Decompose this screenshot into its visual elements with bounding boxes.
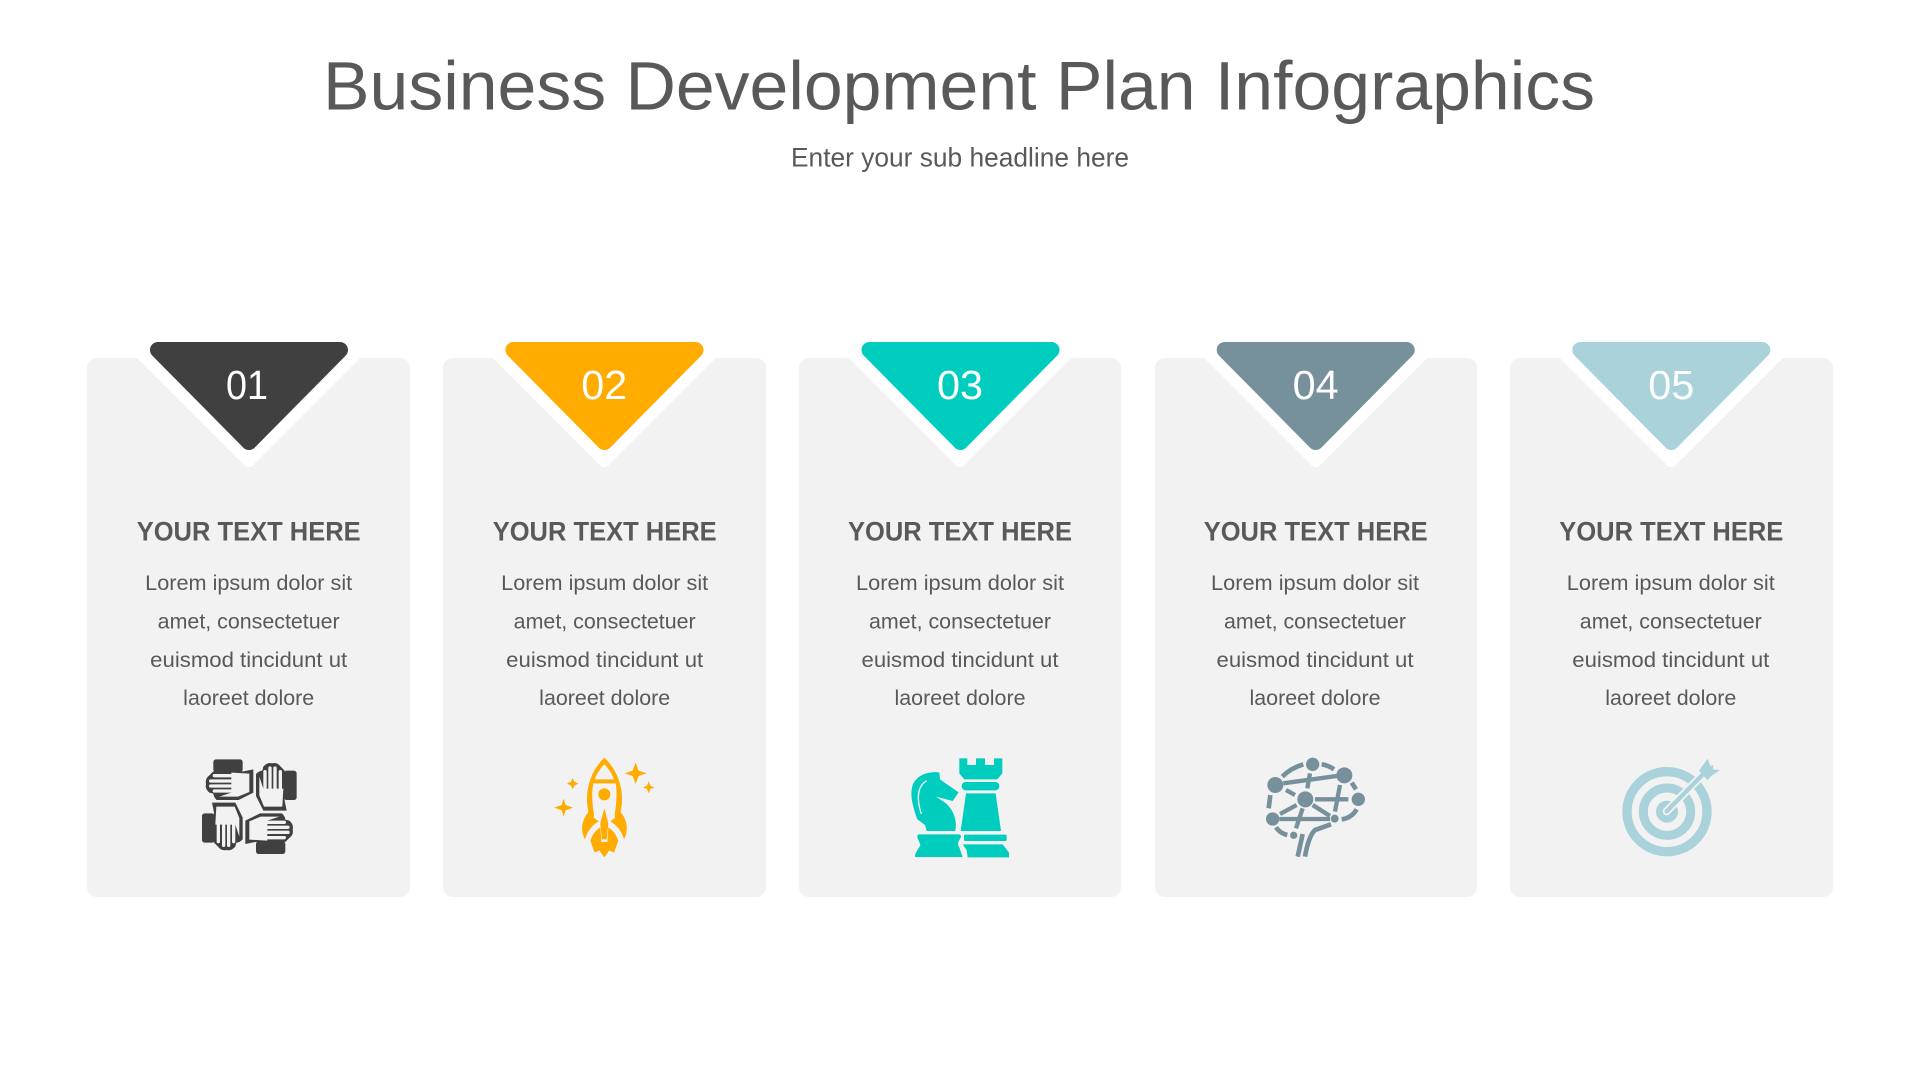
body text 02: laoreet dolore — [539, 687, 670, 710]
panel: step 05 — [1510, 340, 1833, 897]
card background — [87, 358, 410, 897]
heading 02: YOUR TEXT HERE — [493, 516, 717, 546]
number badge 03 — [870, 350, 1052, 442]
number badge 03: 03 — [937, 362, 983, 408]
number badge 01 — [158, 350, 340, 442]
number badge 02 — [514, 350, 696, 442]
body text 03: euismod tincidunt ut — [862, 649, 1059, 672]
card background — [1510, 358, 1833, 897]
body text 01: laoreet dolore — [183, 687, 314, 710]
card background — [799, 358, 1121, 897]
icon: rocket with stars — [554, 758, 654, 857]
number badge 04: 04 — [1293, 362, 1339, 408]
title: Business Development Plan Infographics — [323, 48, 1595, 124]
card background — [1155, 358, 1477, 897]
icon: brain network — [1266, 758, 1365, 857]
body text 05: laoreet dolore — [1605, 687, 1736, 710]
white notch — [1195, 340, 1437, 461]
body text 01 — [145, 572, 352, 710]
number badge 04 — [1225, 350, 1407, 442]
body text 04 — [1211, 572, 1419, 710]
number badge 02: 02 — [581, 362, 627, 408]
icon: target with arrow — [1627, 759, 1720, 852]
icon: chess knight and rook — [911, 758, 1009, 857]
number badge 01: 01 — [226, 362, 268, 408]
card background — [443, 358, 766, 897]
body text 01: Lorem ipsum dolor sit — [145, 572, 352, 595]
subtitle: Enter your sub headline here — [791, 142, 1129, 172]
white notch — [1550, 340, 1792, 461]
body text 02: amet, consectetuer — [514, 610, 696, 634]
body text 05 — [1567, 572, 1775, 710]
number badge 05: 05 — [1648, 362, 1694, 408]
panel: step 02 — [443, 340, 766, 897]
heading 04: YOUR TEXT HERE — [1204, 516, 1428, 546]
white notch — [483, 340, 725, 461]
body text 04: Lorem ipsum dolor sit — [1211, 572, 1419, 595]
body text 01: euismod tincidunt ut — [150, 649, 347, 672]
body text 02: Lorem ipsum dolor sit — [501, 572, 708, 595]
body text 02: euismod tincidunt ut — [506, 649, 703, 672]
number badge 05 — [1580, 350, 1762, 442]
body text 03 — [856, 572, 1064, 710]
body text 03: Lorem ipsum dolor sit — [856, 572, 1064, 595]
body text 02 — [501, 572, 708, 710]
body text 05: amet, consectetuer — [1580, 610, 1762, 634]
panel: step 01 — [87, 340, 410, 897]
body text 03: amet, consectetuer — [869, 610, 1051, 634]
body text 04: laoreet dolore — [1250, 687, 1380, 710]
white notch — [839, 340, 1081, 461]
heading 03: YOUR TEXT HERE — [848, 516, 1072, 546]
body text 05: Lorem ipsum dolor sit — [1567, 572, 1775, 595]
body text 01: amet, consectetuer — [158, 610, 340, 634]
body text 04: amet, consectetuer — [1224, 610, 1406, 634]
icon: four joined hands — [202, 759, 297, 854]
body text 03: laoreet dolore — [894, 687, 1026, 710]
heading 01: YOUR TEXT HERE — [137, 516, 361, 546]
panel: step 03 — [799, 340, 1121, 897]
body text 05: euismod tincidunt ut — [1572, 649, 1769, 672]
white notch — [128, 340, 370, 461]
body text 04: euismod tincidunt ut — [1216, 649, 1414, 672]
panel: step 04 — [1155, 340, 1477, 897]
heading 05: YOUR TEXT HERE — [1559, 516, 1783, 546]
